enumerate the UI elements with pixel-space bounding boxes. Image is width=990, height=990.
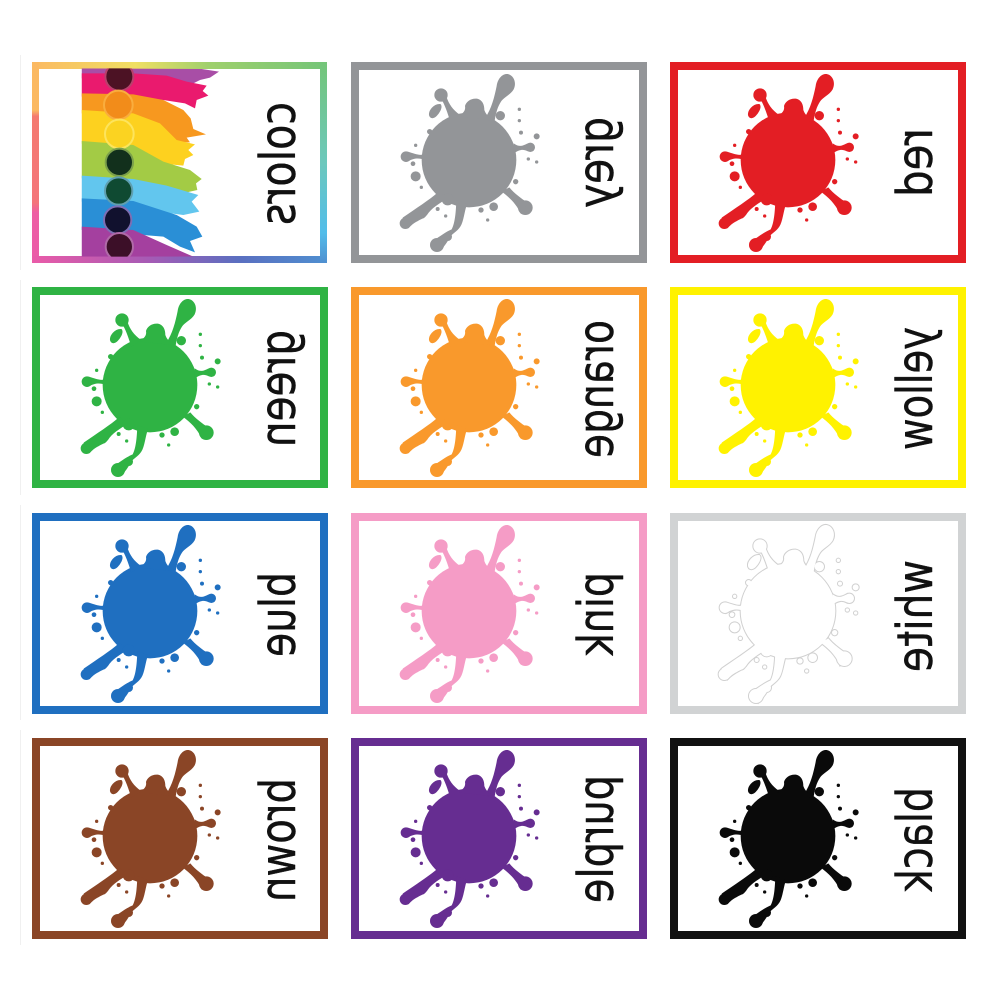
- icon: green paint splat: [81, 299, 221, 477]
- card: white: [674, 517, 962, 710]
- icon: purple paint splat: [400, 750, 540, 928]
- card: orange: [355, 291, 643, 484]
- icon: yellow paint splat: [719, 299, 859, 477]
- label: brown: brown: [250, 778, 307, 902]
- paint strokes and jars: [82, 63, 219, 260]
- rainbow frame: [32, 62, 327, 263]
- label: grey: grey: [568, 117, 625, 208]
- card edge hairlines: [20, 55, 22, 945]
- icon: pink paint splat: [400, 525, 540, 703]
- label: colors: colors: [250, 102, 307, 225]
- label: blue: blue: [250, 572, 307, 657]
- frame: [355, 742, 643, 935]
- card: grey: [355, 66, 643, 259]
- label: purple: purple: [568, 775, 625, 903]
- frame: [674, 517, 962, 710]
- frame: [674, 291, 962, 484]
- card: brown: [36, 742, 324, 935]
- icon: black paint splat: [719, 750, 859, 928]
- label: yellow: yellow: [887, 327, 944, 450]
- label: green: green: [250, 330, 307, 447]
- label: pink: pink: [568, 572, 625, 656]
- frame: [36, 742, 324, 935]
- frame: [674, 742, 962, 935]
- frame: [674, 66, 962, 259]
- frame: [355, 517, 643, 710]
- card: green: [36, 291, 324, 484]
- card: colors: [32, 62, 327, 263]
- icon: brown paint splat: [81, 750, 221, 928]
- label: white: white: [887, 560, 944, 672]
- icon: red paint splat: [719, 74, 859, 252]
- card: yellow: [674, 291, 962, 484]
- label: orange: orange: [568, 320, 625, 458]
- card: red: [674, 66, 962, 259]
- icon: grey paint splat: [400, 74, 540, 252]
- label: red: red: [887, 128, 944, 197]
- frame: [36, 291, 324, 484]
- icon: orange paint splat: [400, 299, 540, 477]
- label: black: black: [887, 787, 944, 893]
- icon: white paint splat: [719, 525, 859, 703]
- card: purple: [355, 742, 643, 935]
- icon: blue paint splat: [81, 525, 221, 703]
- card: blue: [36, 517, 324, 710]
- frame: [36, 517, 324, 710]
- card: pink: [355, 517, 643, 710]
- card: black: [674, 742, 962, 935]
- frame: [355, 66, 643, 259]
- frame: [355, 291, 643, 484]
